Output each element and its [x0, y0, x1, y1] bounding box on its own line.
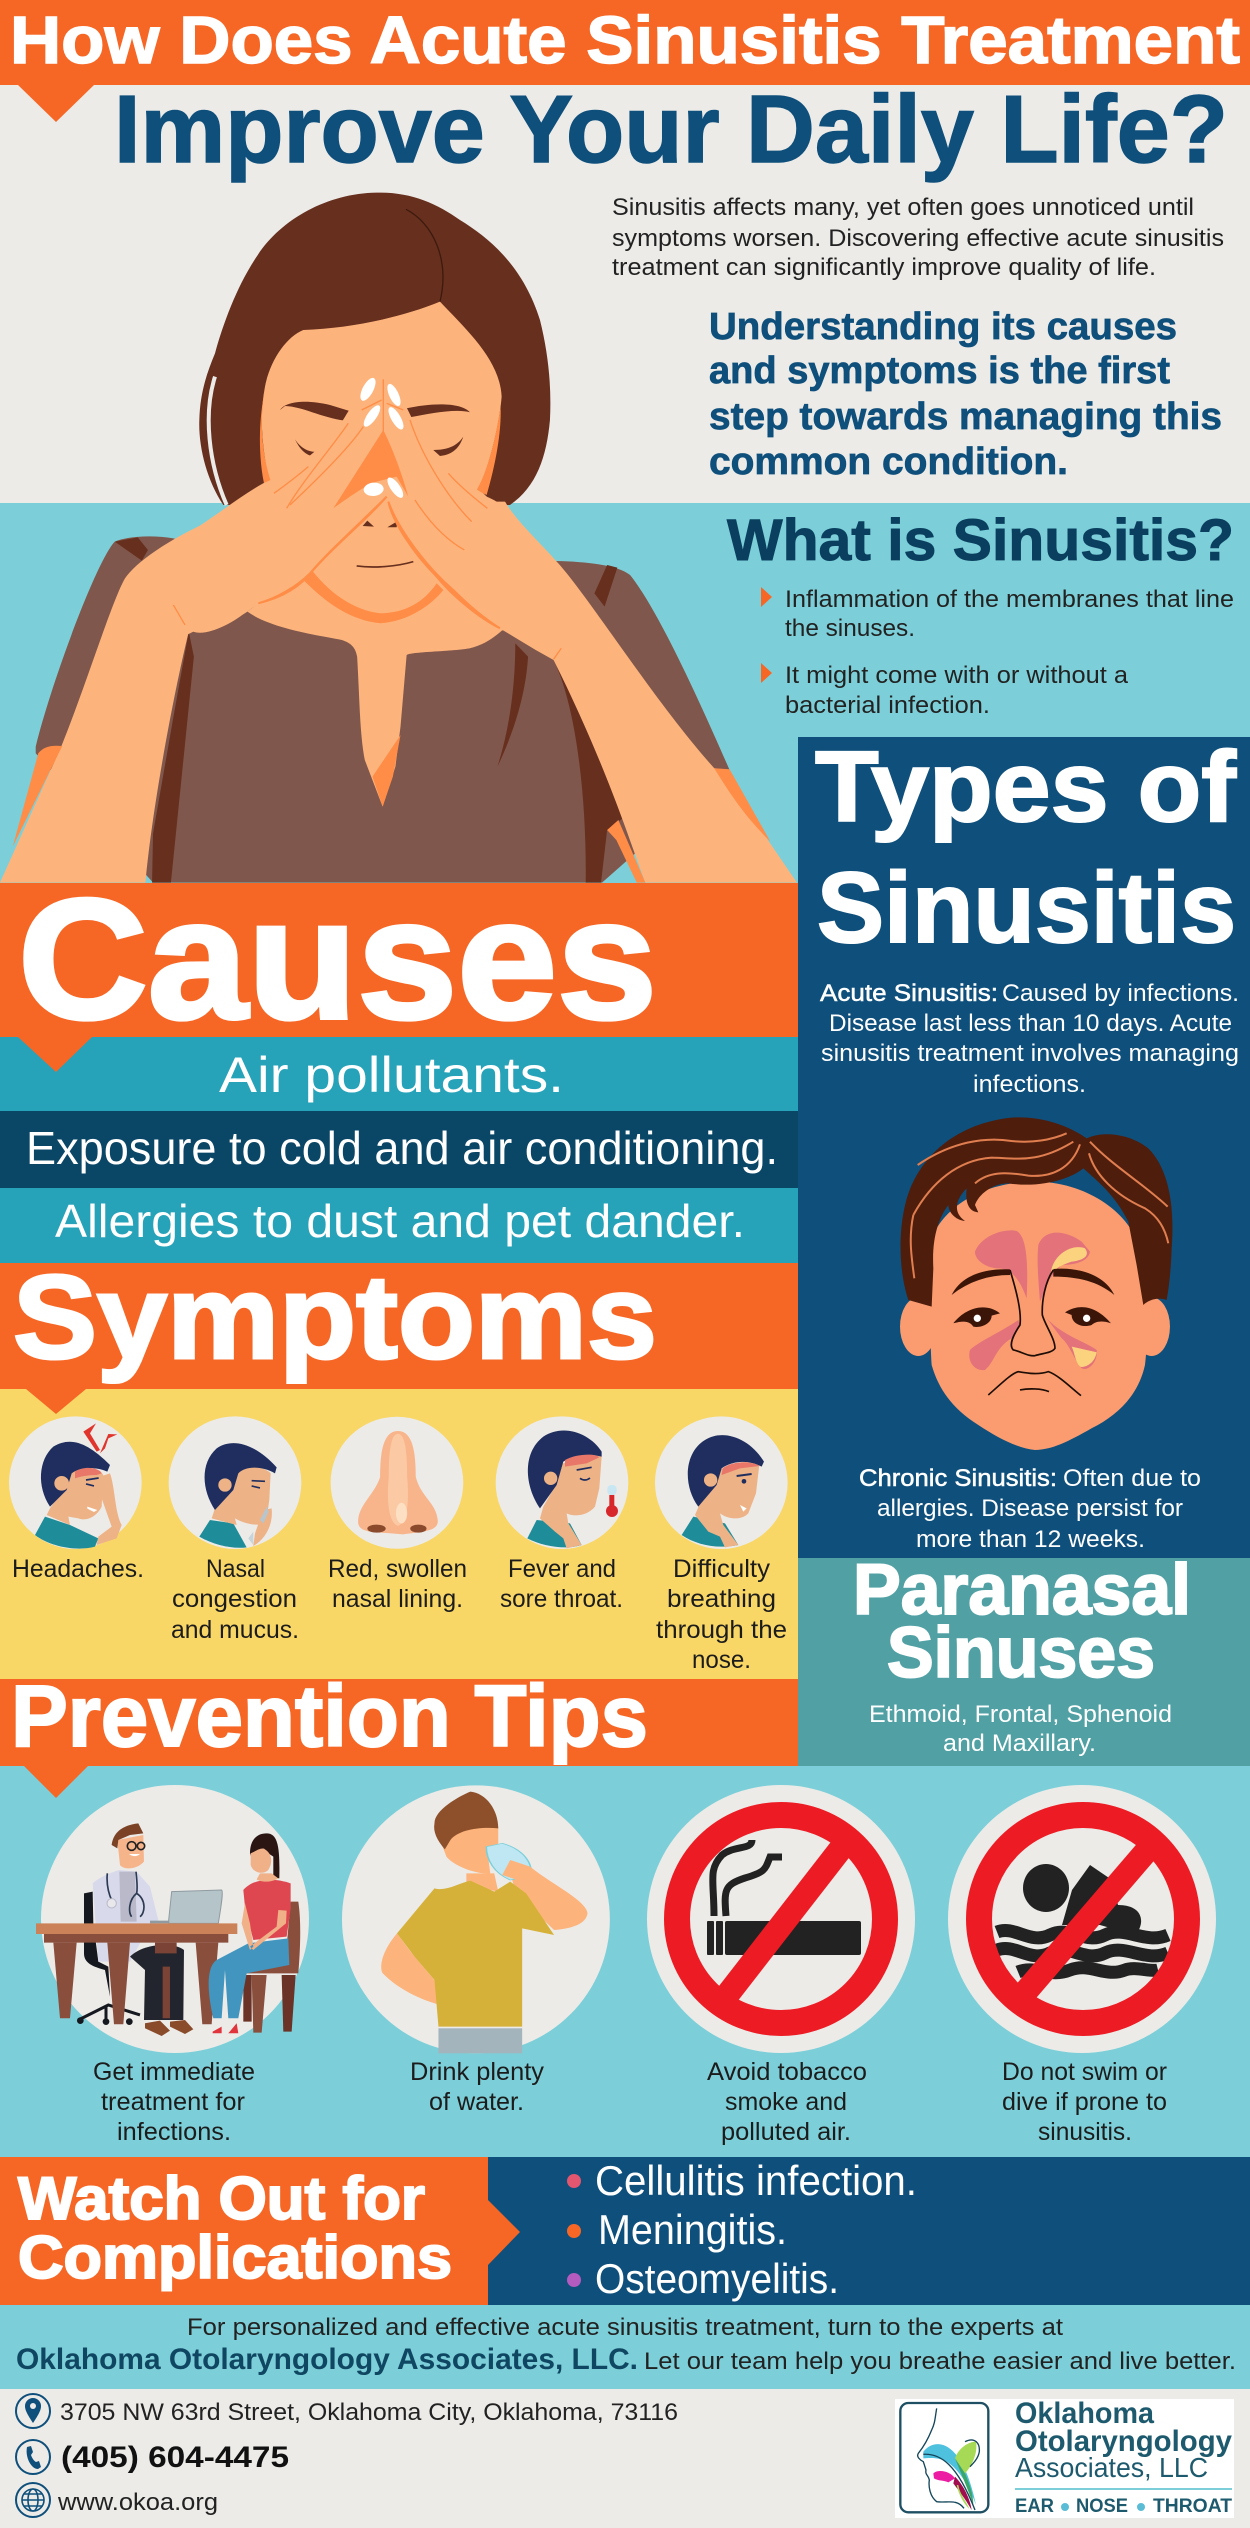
panel: complications: Meningitis.: [598, 2206, 787, 2253]
icon: globe: [16, 2483, 50, 2517]
icon: phone: [16, 2440, 50, 2474]
panel: types of sinusitis: more than 12 weeks.: [916, 1526, 1145, 1553]
prevention labels: treatment for: [101, 2088, 245, 2116]
panel: types of sinusitis: infections.: [973, 1071, 1086, 1098]
prevention labels: polluted air.: [721, 2118, 851, 2146]
icon: nose and throat profile: [900, 2403, 988, 2512]
illustration: man with inflamed sinuses: [900, 1117, 1172, 1450]
prevention labels: Get immediate: [93, 2058, 255, 2086]
logo: Oklahoma Otolaryngology Associates: [895, 2397, 1234, 2518]
icon: no swimming: [948, 1785, 1216, 2053]
key message: [709, 306, 1222, 483]
panel: what is sinusitis: It might come with or without a: [785, 662, 1129, 689]
symptom labels: congestion: [172, 1585, 297, 1613]
panel: types of sinusitis: Often due to: [1063, 1465, 1201, 1492]
symptom labels: and mucus.: [171, 1616, 299, 1644]
prevention labels: sinusitis.: [1038, 2118, 1132, 2146]
logo: Oklahoma Otolaryngology Associates: EAR: [1015, 2496, 1054, 2517]
closing call to action: Let our team help you breathe easier and live better.: [644, 2348, 1236, 2375]
panel: causes: Exposure to cold and air conditioning.: [26, 1122, 778, 1174]
contact details: [16, 2394, 678, 2517]
icon: nasal congestion: [169, 1416, 301, 1549]
panel: symptoms: Symptoms: [13, 1251, 657, 1384]
symptom labels: breathing: [667, 1585, 776, 1613]
panel: complications: Osteomyelitis.: [595, 2255, 839, 2302]
prevention labels: dive if prone to: [1002, 2088, 1167, 2116]
panel: causes: Allergies to dust and pet dander.: [55, 1195, 745, 1247]
symptom labels: Headaches.: [12, 1555, 144, 1583]
contact details: www.okoa.org: [57, 2489, 218, 2516]
key message: and symptoms is the first: [709, 350, 1170, 392]
panel: what is sinusitis: [727, 508, 1234, 719]
panel: causes: Air pollutants.: [219, 1047, 564, 1103]
symptom labels: Red, swollen: [328, 1555, 467, 1583]
prevention labels: Avoid tobacco: [707, 2058, 867, 2086]
panel: paranasal sinuses: and Maxillary.: [943, 1730, 1096, 1757]
prevention labels: Do not swim or: [1002, 2058, 1167, 2086]
intro paragraph: Sinusitis affects many, yet often goes unnoticed until: [612, 194, 1194, 221]
panel: complications: Watch Out for: [18, 2165, 425, 2232]
panel: complications: Cellulitis infection.: [595, 2157, 917, 2204]
title banner: How Does Acute Sinusitis Treatment: [10, 3, 1240, 78]
illustration: woman pressing her sinuses: [0, 193, 797, 883]
panel: what is sinusitis: bacterial infection.: [785, 692, 990, 719]
closing call to action: For personalized and effective acute sinusitis treatment, turn to the experts at: [187, 2314, 1063, 2341]
logo: Oklahoma Otolaryngology Associates: THROAT: [1153, 2496, 1232, 2517]
panel: types of sinusitis: Caused by infections.: [1002, 980, 1239, 1007]
panel: types of sinusitis: [798, 731, 1250, 1558]
panel: symptoms: [0, 1251, 798, 1679]
symptom labels: Nasal: [206, 1555, 265, 1583]
panel: what is sinusitis: What is Sinusitis?: [727, 508, 1234, 573]
panel: paranasal sinuses: Paranasal: [853, 1551, 1191, 1630]
icon: location pin: [16, 2394, 50, 2428]
panel: paranasal sinuses: Sinuses: [887, 1614, 1155, 1693]
prevention labels: infections.: [117, 2118, 231, 2146]
key message: step towards managing this: [709, 396, 1222, 438]
panel: types of sinusitis: Disease last less than 10 days. Acute: [829, 1010, 1232, 1037]
panel: paranasal sinuses: Ethmoid, Frontal, Sphenoid: [869, 1701, 1172, 1728]
panel: types of sinusitis: Sinusitis: [817, 852, 1236, 964]
icon: swollen nose: [331, 1417, 463, 1549]
symptom labels: [12, 1555, 787, 1674]
panel: what is sinusitis: the sinuses.: [785, 615, 915, 642]
title banner: [0, 0, 1250, 122]
closing call to action: [16, 2314, 1236, 2376]
panel: types of sinusitis: Chronic Sinusitis:: [859, 1465, 1057, 1492]
panel: types of sinusitis: Types of: [815, 731, 1237, 843]
panel: complications: Complications: [18, 2224, 452, 2291]
panel: prevention tips: [0, 1668, 1216, 2146]
subtitle: Improve Your Daily Life?: [114, 76, 1228, 183]
icon: doctor consultation: [36, 1785, 309, 2053]
panel: what is sinusitis: Inflammation of the membranes that line: [785, 586, 1234, 613]
icon: breathing difficulty: [655, 1416, 788, 1549]
prevention labels: [93, 2058, 1167, 2146]
closing call to action: Oklahoma Otolaryngology Associates, LLC.: [16, 2343, 638, 2376]
key message: Understanding its causes: [709, 306, 1177, 348]
panel: prevention tips: Prevention Tips: [11, 1668, 648, 1765]
panel: types of sinusitis: allergies. Disease persist for: [877, 1495, 1183, 1522]
icon: no smoking: [647, 1785, 915, 2053]
prevention labels: of water.: [429, 2088, 524, 2116]
panel: types of sinusitis: sinusitis treatment involves managing: [821, 1040, 1239, 1067]
logo: Oklahoma Otolaryngology Associates: NOSE: [1076, 2496, 1128, 2517]
intro paragraph: treatment can significantly improve quality of life.: [612, 254, 1156, 281]
prevention labels: smoke and: [725, 2088, 847, 2116]
contact details: (405) 604-4475: [61, 2441, 289, 2474]
logo: Oklahoma Otolaryngology Associates: Oklahoma: [1015, 2397, 1154, 2430]
panel: paranasal sinuses: [798, 1551, 1250, 1766]
logo: Oklahoma Otolaryngology Associates: Associates, LLC: [1015, 2452, 1208, 2483]
panel: causes: Causes: [18, 864, 657, 1055]
prevention labels: Drink plenty: [410, 2058, 545, 2086]
panel: complications: [0, 2157, 1250, 2305]
contact details: 3705 NW 63rd Street, Oklahoma City, Oklahoma, 73116: [60, 2399, 678, 2426]
icon: headache: [9, 1416, 142, 1549]
symptom labels: nose.: [692, 1646, 751, 1674]
logo: Oklahoma Otolaryngology Associates: Otolaryngology: [1015, 2425, 1232, 2458]
symptom labels: through the: [656, 1616, 787, 1644]
symptom labels: sore throat.: [500, 1585, 623, 1613]
panel: causes: [0, 864, 798, 1263]
icon: man drinking water: [342, 1785, 610, 2053]
panel: types of sinusitis: Acute Sinusitis:: [820, 980, 998, 1007]
symptom labels: nasal lining.: [332, 1585, 463, 1613]
intro paragraph: symptoms worsen. Discovering effective acute sinusitis: [612, 225, 1224, 252]
symptom labels: Fever and: [508, 1555, 616, 1583]
icon: fever: [496, 1416, 628, 1549]
key message: common condition.: [709, 441, 1068, 483]
intro paragraph: [612, 194, 1224, 281]
symptom labels: Difficulty: [673, 1555, 771, 1583]
